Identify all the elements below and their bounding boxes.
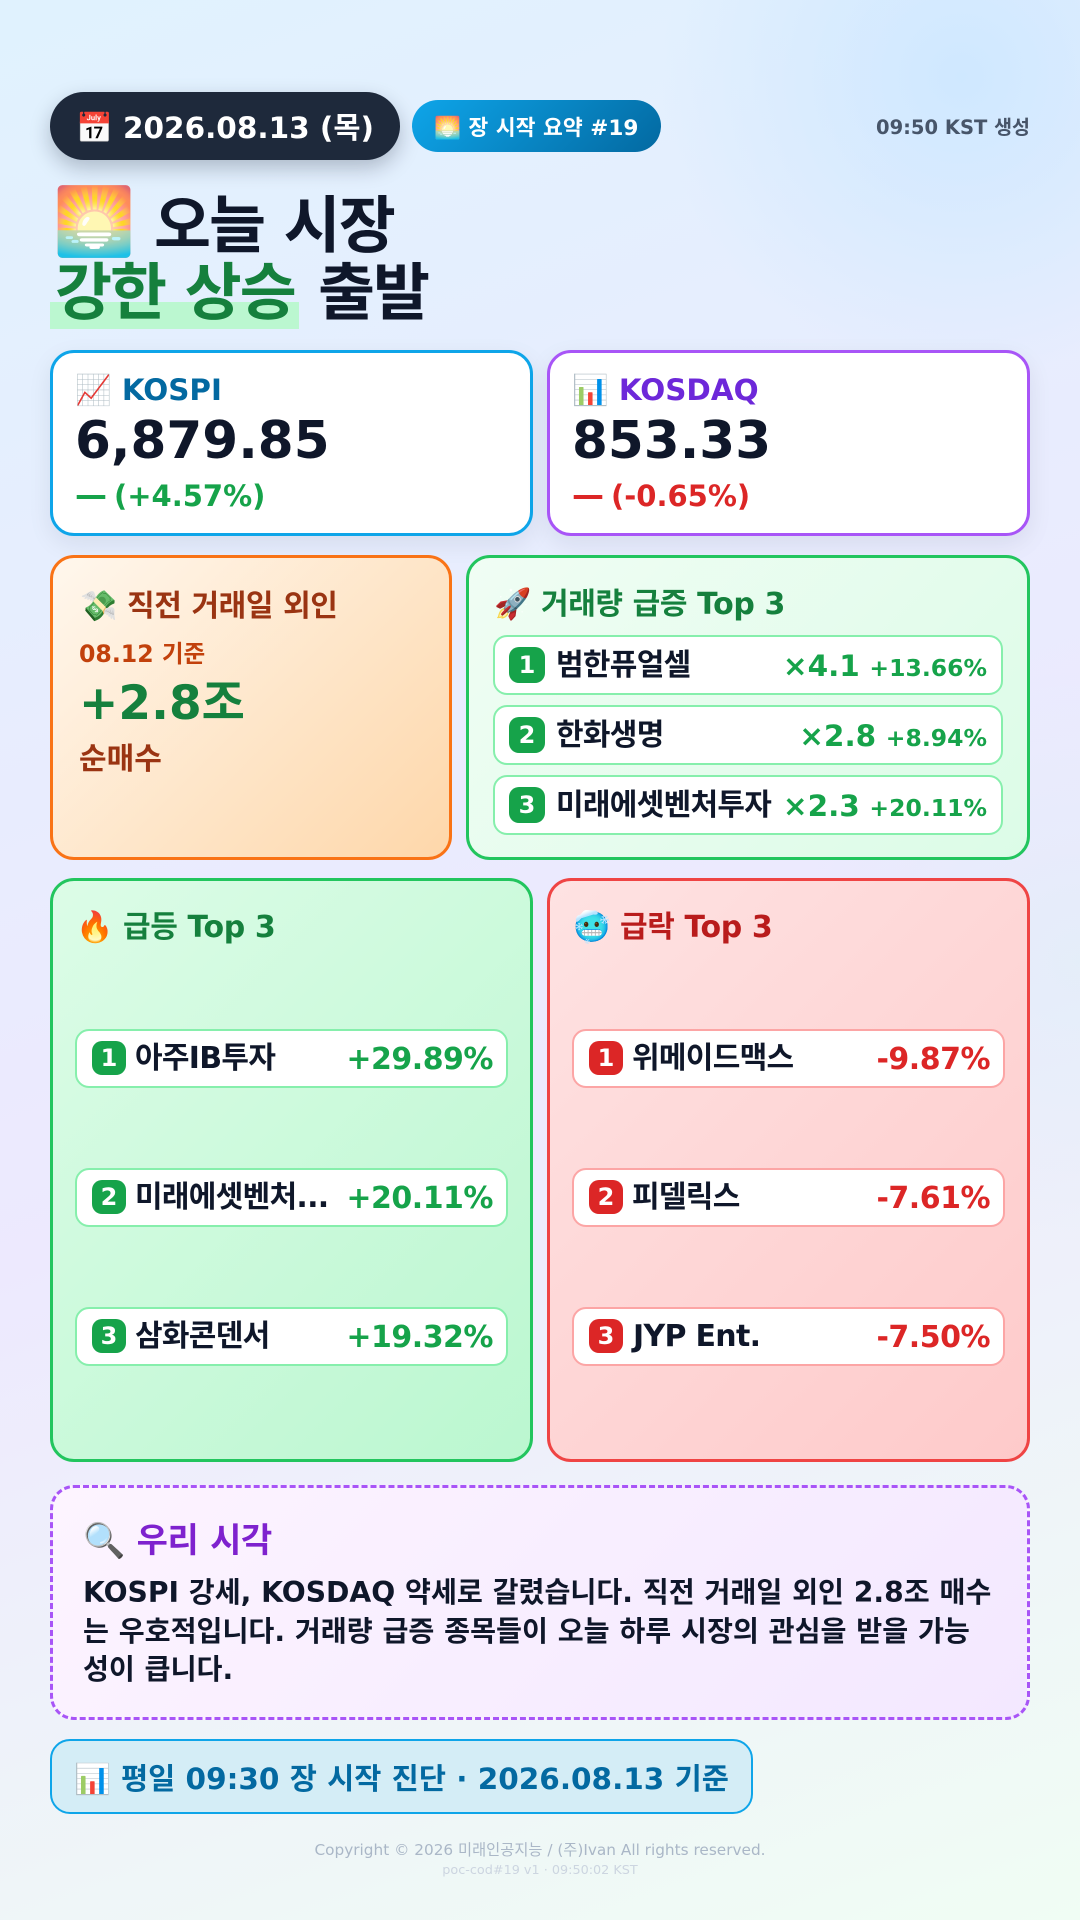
- footer note pill: [50, 1739, 753, 1814]
- loser row 3: [572, 1307, 1005, 1366]
- loser row 3: 3: [598, 1322, 614, 1350]
- volume row 2: ×2.8 +8.94%: [799, 719, 987, 753]
- KOSDAQ label: 📊 KOSDAQ: [572, 373, 759, 407]
- gainers heading: 🔥 급등 Top 3: [76, 910, 275, 945]
- panel: top losers: [547, 878, 1030, 1462]
- gainer row 1: +29.89%: [346, 1042, 493, 1077]
- loser row 2: [572, 1168, 1005, 1227]
- loser row 2: 피델릭스: [632, 1180, 740, 1215]
- volume row 3: 3: [519, 791, 535, 819]
- volume row 2: 한화생명: [556, 718, 664, 753]
- foreign heading: 💸 직전 거래일 외인: [80, 589, 338, 624]
- panel: foreign investors: [50, 555, 452, 860]
- view body: KOSPI 강세, KOSDAQ 약세로 갈렸습니다. 직전 거래일 외인 2.8조 매수: [83, 1576, 991, 1609]
- volume row 3: ×2.3 +20.11%: [783, 789, 987, 823]
- gainer row 2: 2: [101, 1183, 117, 1211]
- foreign value: +2.8조: [79, 676, 245, 731]
- gainer row 1: 1: [101, 1044, 117, 1072]
- gainer row 1: [75, 1029, 508, 1088]
- loser row 2: -7.61%: [876, 1181, 990, 1216]
- title line 2 rest: 출발: [318, 256, 428, 329]
- loser row 1: 1: [598, 1044, 614, 1072]
- volume row 2: 2: [519, 721, 535, 749]
- panel: our view: [50, 1485, 1030, 1720]
- KOSPI change: —(+4.57%): [75, 476, 265, 514]
- panel: top gainers: [50, 878, 533, 1462]
- volume row 1: [493, 635, 1003, 695]
- gainer row 3: 삼화콘덴서: [135, 1319, 270, 1354]
- KOSPI label: 📈 KOSPI: [75, 373, 222, 407]
- panel: KOSPI: [50, 350, 533, 536]
- session badge: [412, 100, 661, 152]
- losers heading: 🥶 급락 Top 3: [573, 910, 772, 945]
- volume row 1: ×4.1 +13.66%: [783, 649, 987, 683]
- volume row 3: [493, 775, 1003, 835]
- foreign date: 08.12 기준: [79, 640, 205, 668]
- KOSDAQ change: —(-0.65%): [572, 476, 750, 514]
- date pill: [50, 92, 400, 160]
- title: [50, 183, 428, 329]
- loser row 1: -9.87%: [876, 1042, 990, 1077]
- title emoji: sunrise: 🌅: [53, 183, 135, 260]
- title highlight: [50, 302, 299, 329]
- panel: KOSDAQ: [547, 350, 1030, 536]
- gainer row 1: 아주IB투자: [135, 1041, 275, 1076]
- loser row 3: -7.50%: [876, 1320, 990, 1355]
- gainer row 3: [75, 1307, 508, 1366]
- session badge: 🌅 장 시작 요약 #19: [434, 116, 638, 141]
- view heading: 🔍 우리 시각: [83, 1521, 272, 1561]
- loser row 1: 위메이드맥스: [632, 1041, 793, 1076]
- view body: 는 우호적입니다. 거래량 급증 종목들이 오늘 하루 시장의 관심을 받을 가능: [83, 1615, 970, 1648]
- KOSDAQ value: 853.33: [572, 411, 771, 471]
- title line 1: 오늘 시장: [154, 189, 394, 262]
- generated time: 09:50 KST 생성: [876, 116, 1030, 139]
- gainer row 2: [75, 1168, 508, 1227]
- volume row 2: [493, 705, 1003, 765]
- gainer row 3: 3: [101, 1322, 117, 1350]
- panel: volume surge: [466, 555, 1030, 860]
- view body: 성이 큽니다.: [83, 1653, 233, 1686]
- gainer row 2: 미래에셋벤처...: [135, 1180, 328, 1215]
- KOSPI value: 6,879.85: [75, 411, 330, 471]
- foreign note: 순매수: [79, 742, 162, 777]
- build tag: poc-cod#19 v1 · 09:50:02 KST: [442, 1863, 638, 1878]
- volume row 1: 1: [519, 651, 535, 679]
- footer note pill: 📊 평일 09:30 장 시작 진단 · 2026.08.13 기준: [74, 1762, 729, 1796]
- view body: [83, 1576, 991, 1686]
- gainer row 2: +20.11%: [346, 1181, 493, 1216]
- date pill: 📅 2026.08.13 (목): [76, 111, 374, 145]
- volume heading: 🚀 거래량 급증 Top 3: [494, 587, 785, 622]
- volume row 3: 미래에셋벤처투자: [556, 788, 771, 823]
- loser row 1: [572, 1029, 1005, 1088]
- volume row 1: 범한퓨얼셀: [556, 648, 690, 683]
- copyright: Copyright © 2026 미래인공지능 / (주)Ivan All rights reserved.: [314, 1841, 766, 1859]
- gainer row 3: +19.32%: [346, 1320, 493, 1355]
- loser row 2: 2: [598, 1183, 614, 1211]
- loser row 3: JYP Ent.: [633, 1319, 760, 1354]
- title line 2 accent: 강한 상승: [55, 256, 295, 329]
